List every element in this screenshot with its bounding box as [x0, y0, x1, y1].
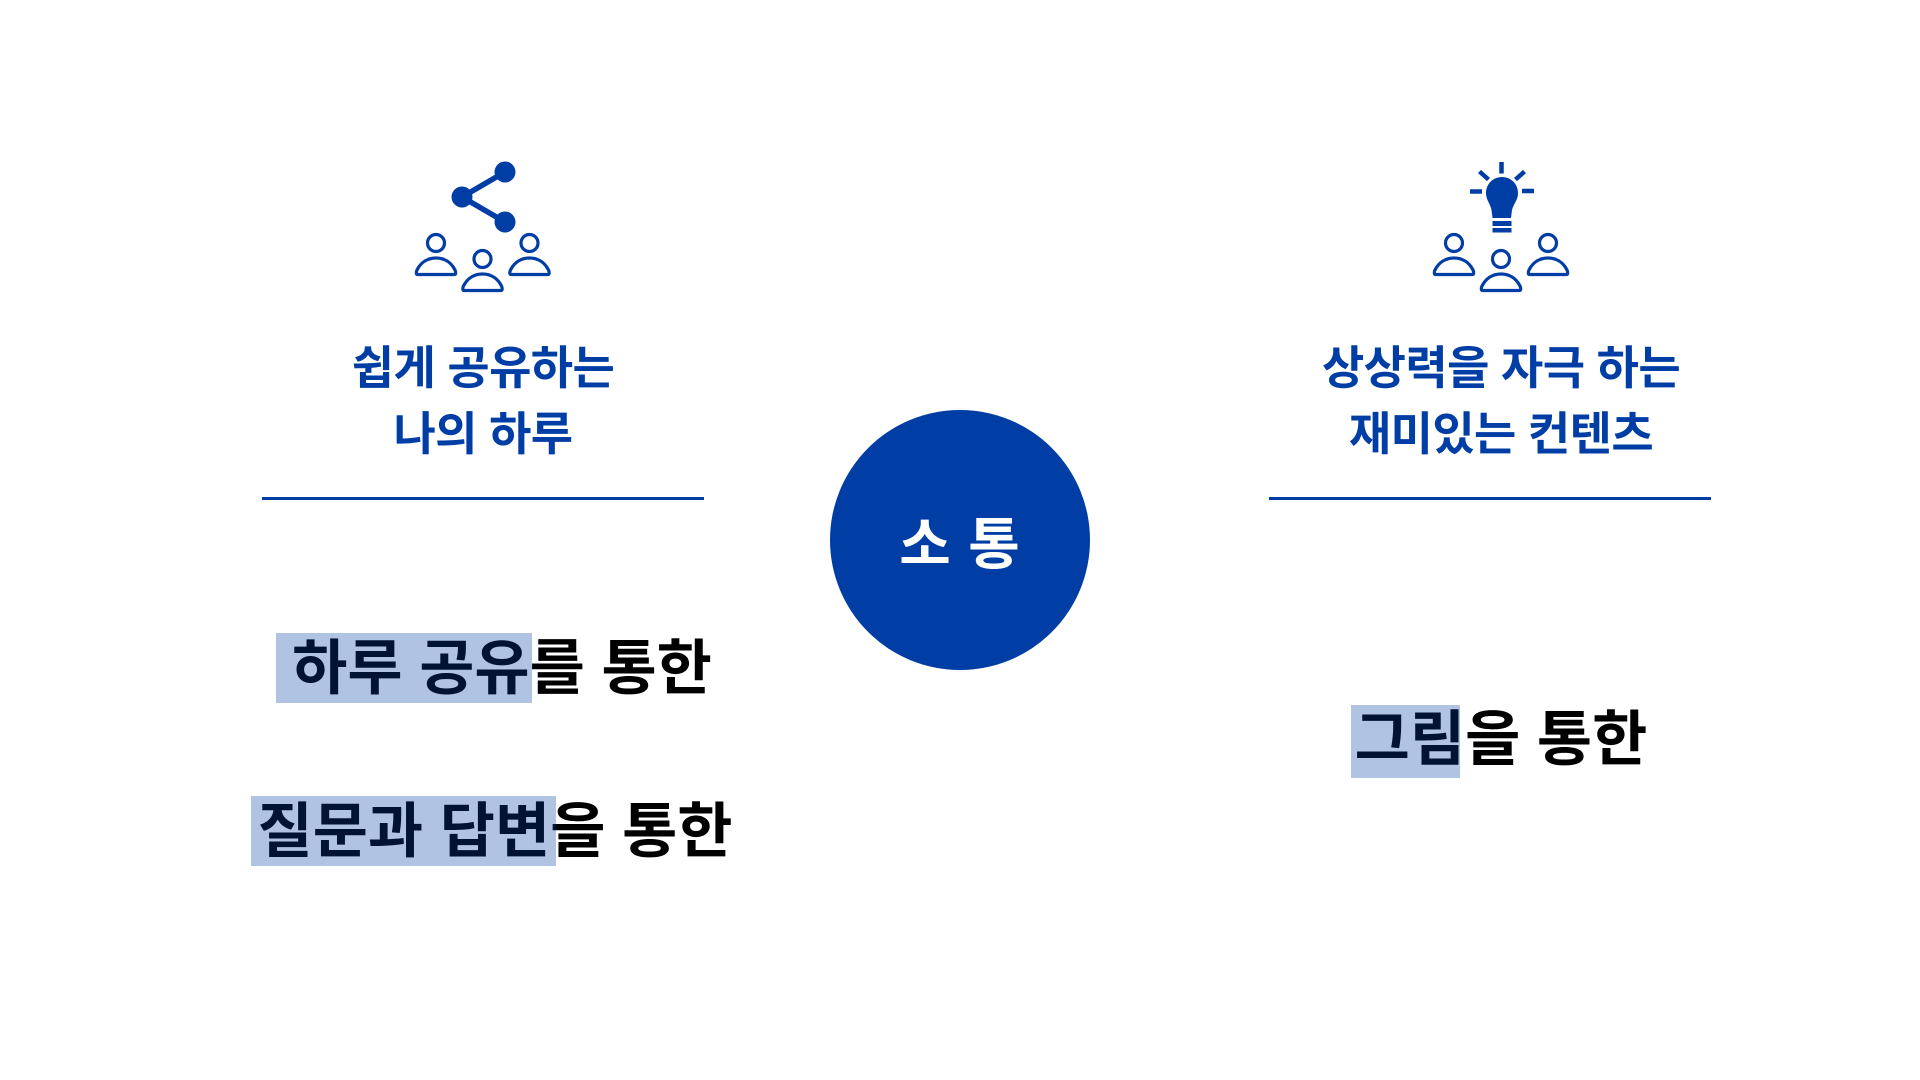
text: 질문과 답변을 통한: 질문과 답변을 통한 — [258, 798, 732, 865]
highlight: 질문과 답변 — [251, 796, 556, 866]
heading: left: 쉽게 공유하는 — [352, 342, 614, 394]
divider: left — [262, 497, 704, 500]
heading: left: 나의 하루 — [393, 408, 573, 460]
circle label: 소 통 — [899, 513, 1021, 576]
heading: right: 상상력을 자극 하는 — [1322, 342, 1680, 394]
heading: right — [1322, 342, 1680, 460]
heading: right: 재미있는 컨텐츠 — [1349, 408, 1653, 460]
icon: share with three people — [414, 162, 551, 292]
highlight: 그림 — [1351, 705, 1460, 778]
icon: light bulb with three people — [1432, 162, 1570, 292]
text: 하루 공유를 통한: 하루 공유를 통한 — [292, 635, 712, 702]
divider: right — [1269, 497, 1711, 500]
highlight: 하루 공유 — [276, 633, 532, 703]
heading: left — [352, 342, 614, 460]
text: 그림을 통한: 그림을 통한 — [1355, 706, 1647, 773]
center circle — [830, 410, 1090, 670]
